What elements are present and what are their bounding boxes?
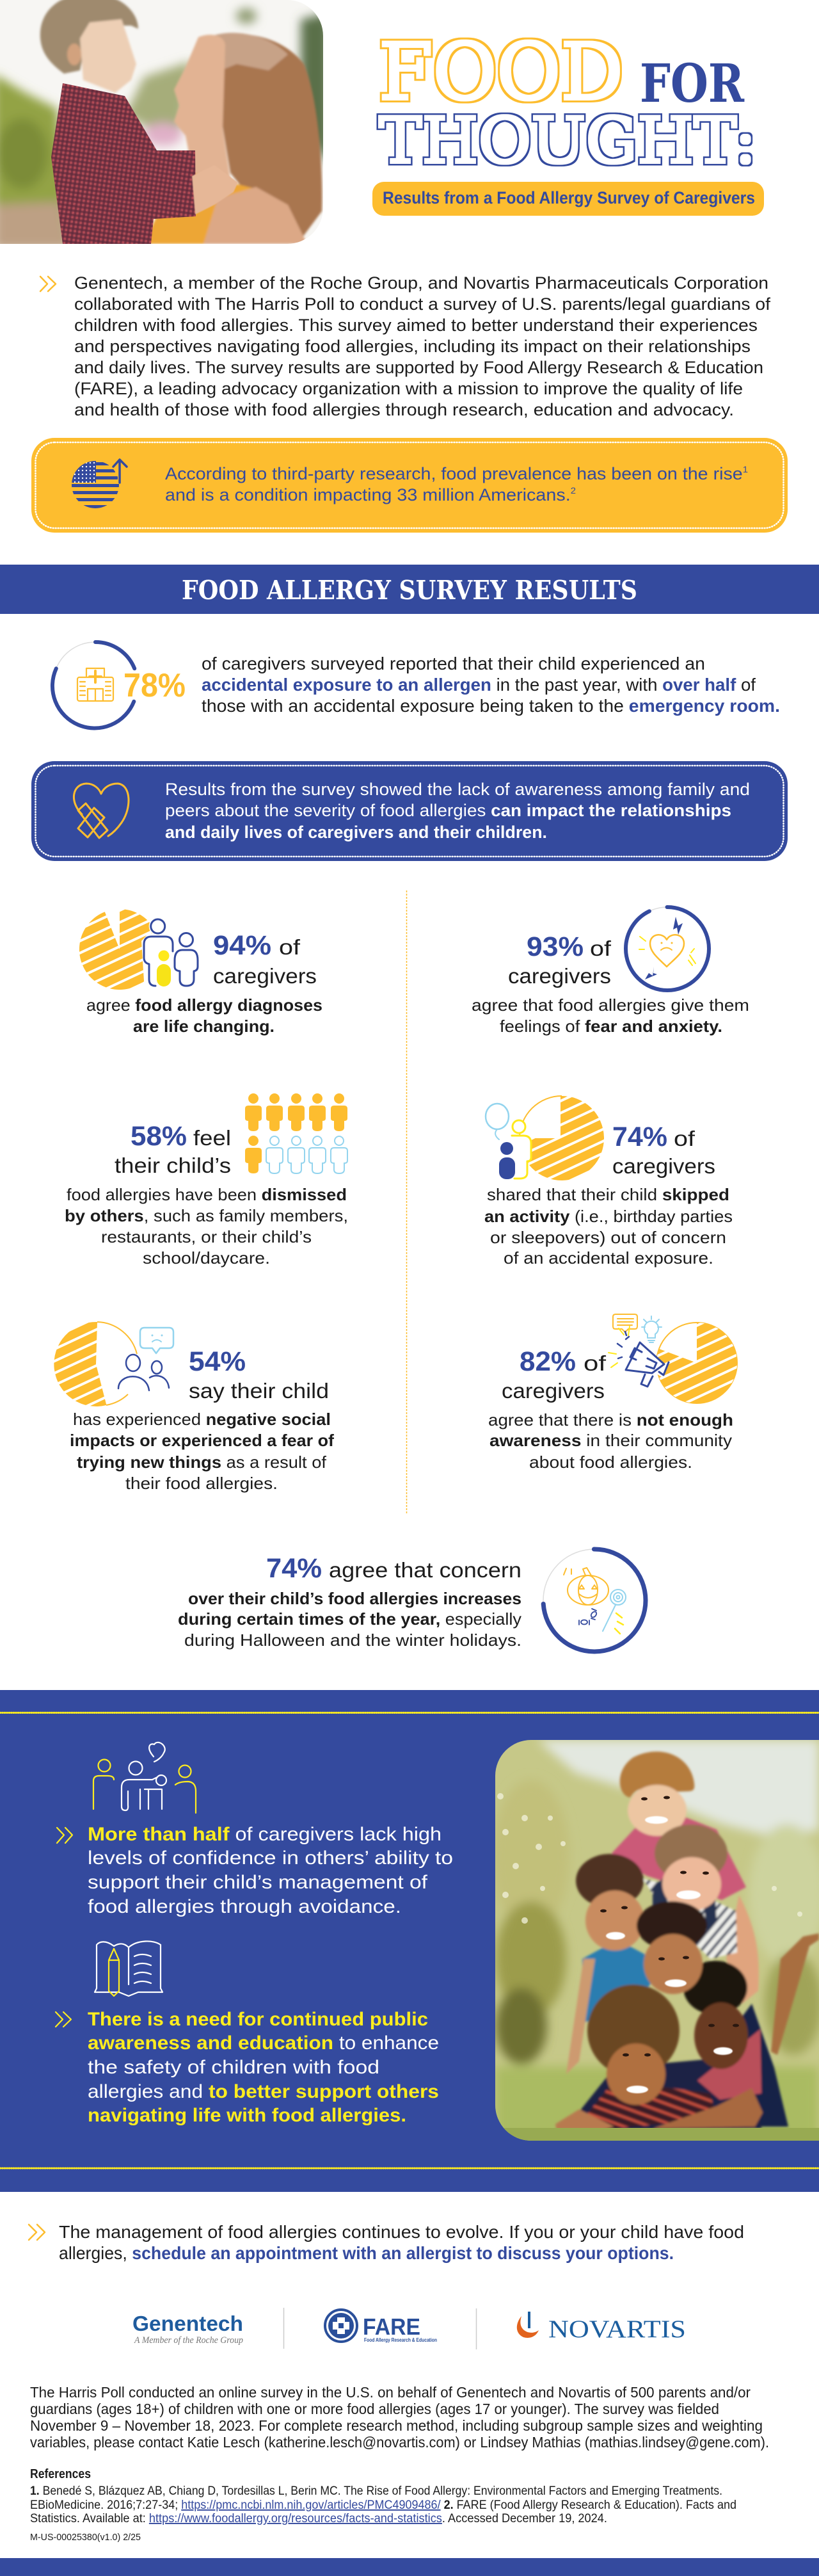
pictogram: ten people	[245, 1093, 347, 1173]
text: public awareness: awareness and education to enhance	[88, 2033, 439, 2054]
footer band	[0, 2558, 819, 2576]
logo: FARE: FARE	[363, 2314, 420, 2340]
description: of caregivers surveyed reported that their child experienced an	[202, 654, 705, 673]
text: public awareness	[88, 2009, 439, 2126]
icon: family with heart	[93, 1743, 196, 1813]
stat: 74 percent seasonal concern	[178, 1549, 646, 1652]
icon: US flag with arrow	[72, 460, 127, 508]
references: References	[30, 2467, 91, 2481]
pie chart	[520, 1096, 604, 1180]
stat: 82 percent: caregivers	[502, 1379, 605, 1403]
description: their food allergies.	[125, 1474, 278, 1493]
description: during certain times of the year, especially	[178, 1609, 521, 1629]
description: trying new things as a result of	[77, 1453, 327, 1472]
intro text: and daily lives. The survey results are supported by Food Allergy Research & Education	[74, 358, 763, 377]
icon: sad speech bubble and people	[118, 1328, 173, 1390]
heading: 74%	[266, 1553, 322, 1584]
callout text: 1	[743, 464, 748, 474]
stat: 78 percent	[52, 642, 780, 728]
description: has experienced negative social	[73, 1410, 331, 1429]
description	[70, 1410, 334, 1493]
stat: 82 percent: of	[584, 1351, 607, 1375]
subtitle pill: Results from a Food Allergy Survey of Caregivers	[383, 188, 755, 207]
stat: 58 percent: feel	[193, 1126, 231, 1150]
icon: book and pencil	[95, 1941, 163, 1996]
panel: awareness callout	[31, 761, 788, 861]
description: food allergies have been dismissed	[67, 1185, 347, 1204]
intro text: and health of those with food allergies through research, education and advocacy.	[74, 400, 734, 419]
section header band	[0, 565, 819, 614]
methodology note	[30, 2384, 769, 2451]
description	[484, 1185, 733, 1268]
panel: prevalence callout	[31, 438, 788, 533]
intro text: (FARE), a leading advocacy organization with a mission to improve the quality of life	[74, 379, 743, 398]
panel: prevalence callout: 2	[571, 485, 576, 495]
logos	[132, 2308, 686, 2349]
description: accidental exposure to an allergen in the past year, with over half of	[202, 675, 756, 695]
description	[488, 1410, 733, 1472]
description: over their child’s food allergies increases	[188, 1589, 521, 1608]
stat: 93 percent: caregivers	[508, 964, 611, 988]
intro text: children with food allergies. This survey aimed to better understand their experiences	[74, 316, 758, 335]
pie chart	[54, 1322, 137, 1406]
references: Statistics. Available at: https://www.foodallergy.org/resources/facts-and-statistics. Accessed December 19, 2024.	[30, 2512, 607, 2525]
call to action: allergies, schedule an appointment with an allergist to discuss your options.	[59, 2243, 674, 2263]
stat: 54 percent	[54, 1322, 334, 1493]
description: agree food allergy diagnoses	[86, 995, 322, 1015]
description: of an accidental exposure.	[504, 1248, 713, 1268]
icon: family	[141, 917, 198, 991]
stat: 93 percent	[472, 907, 749, 1036]
description: shared that their child skipped	[487, 1185, 729, 1204]
text: confidence	[88, 1824, 453, 1917]
description: are life changing.	[133, 1017, 274, 1036]
icon: chevron	[40, 277, 56, 291]
stat: 94 percent	[79, 909, 322, 1036]
description	[472, 995, 749, 1036]
title word: FOOD: FOOD	[379, 27, 623, 118]
text: public awareness: navigating life with food allergies.	[88, 2105, 406, 2126]
text: public awareness: the safety of children with food	[88, 2057, 379, 2078]
description: feelings of fear and anxiety.	[500, 1017, 722, 1036]
photo: children in a pile	[493, 1740, 819, 2143]
methodology note: The Harris Poll conducted an online survey in the U.S. on behalf of Genentech and Novartis of 500 parents and/or	[30, 2384, 751, 2401]
references: EBioMedicine. 2016;7:27-34; https://pmc.ncbi.nlm.nih.gov/articles/PMC4909486/ 2. FARE (Food Allergy Research & Education). Facts and	[30, 2499, 736, 2512]
stat: 93 percent: of	[590, 937, 612, 960]
icon: chevron	[29, 2225, 45, 2240]
description: or sleepovers) out of concern	[490, 1228, 726, 1247]
description	[65, 1185, 348, 1268]
callout text: peers about the severity of food allergies can impact the relationships	[165, 801, 731, 820]
methodology note: guardians (ages 18+) of children with one or more food allergies (ages 17 or younger). The survey was fielded	[30, 2401, 719, 2417]
heading: 74%	[612, 1122, 667, 1152]
description: an activity (i.e., birthday parties	[484, 1207, 733, 1226]
pie chart	[656, 1323, 737, 1403]
heading: 94%	[213, 930, 271, 961]
title word: FOR: FOR	[640, 53, 745, 115]
photo: mother and son	[0, 0, 330, 250]
callout text: and daily lives of caregivers and their children.	[165, 823, 547, 842]
text: confidence: support their child’s management of	[88, 1872, 428, 1893]
description: restaurants, or their child’s	[101, 1227, 312, 1246]
description: about food allergies.	[529, 1453, 692, 1472]
references	[30, 2467, 736, 2543]
panel: prevalence callout: and is a condition impacting 33 million Americans.	[165, 485, 546, 504]
description	[202, 654, 780, 716]
panel: conclusions	[0, 1690, 819, 2192]
stat: 94 percent: of	[279, 935, 301, 959]
description: those with an accidental exposure being taken to the emergency room.	[202, 696, 780, 716]
description: agree that there is not enough	[488, 1410, 733, 1429]
icon: chevron	[57, 1828, 72, 1843]
logo: FARE: Food Allergy Research & Education	[364, 2337, 437, 2343]
logo: Genentech: A Member of the Roche Group	[134, 2335, 243, 2346]
description: agree that food allergies give them	[472, 995, 749, 1015]
stat: 74 percent skipped activity	[484, 1096, 733, 1268]
percent: 78%	[123, 667, 186, 704]
stat: 74 percent skipped activity: caregivers	[612, 1154, 715, 1178]
text: confidence: food allergies through avoidance.	[88, 1896, 401, 1917]
references: 1. Benedé S, Blázquez AB, Chiang D, Tordesillas L, Berin MC. The Rise of Food Allergy: Environmental Factors and Emerging Treatments.	[30, 2484, 722, 2498]
stat: 58 percent	[65, 1093, 348, 1268]
stat: 94 percent: caregivers	[213, 964, 317, 988]
icon: bandaged heart	[74, 784, 129, 838]
description	[178, 1589, 521, 1650]
text: confidence: More than half of caregivers lack high	[88, 1824, 441, 1845]
stat: 58 percent: their child’s	[115, 1154, 231, 1177]
stat: 54 percent: say their child	[189, 1379, 329, 1403]
text: public awareness: There is a need for continued public	[88, 2009, 428, 2030]
icon: hospital	[77, 668, 113, 701]
stat: 82 percent	[488, 1314, 737, 1472]
stat: 74 percent seasonal concern: agree that concern	[329, 1558, 521, 1582]
logo: Novartis: NOVARTIS	[548, 2315, 686, 2343]
intro text: Genentech, a member of the Roche Group, and Novartis Pharmaceuticals Corporation	[74, 273, 768, 293]
description	[86, 995, 322, 1036]
ring with anxious heart	[626, 907, 709, 990]
description: during Halloween and the winter holidays.	[184, 1630, 521, 1650]
heading: 82%	[520, 1346, 576, 1377]
logo: Genentech: Genentech	[132, 2312, 243, 2335]
text: confidence: levels of confidence in others’ ability to	[88, 1847, 453, 1869]
call to action	[59, 2222, 744, 2263]
stat: 74 percent skipped activity: of	[674, 1127, 696, 1150]
heading: 58%	[131, 1121, 187, 1152]
logo: FARE	[325, 2310, 437, 2343]
heading: 54%	[189, 1346, 246, 1377]
icon: megaphone with speech bubble and lightbulb	[608, 1314, 669, 1387]
heading: 93%	[527, 931, 584, 962]
subtitle pill	[372, 182, 764, 216]
call to action: The management of food allergies continues to evolve. If you or your child have food	[59, 2222, 744, 2242]
text: public awareness: allergies and to better support others	[88, 2081, 439, 2102]
callout text	[165, 780, 750, 842]
references: M-US-00025380(v1.0) 2/25	[30, 2532, 141, 2543]
logo: Novartis	[517, 2312, 686, 2343]
pie chart	[79, 909, 160, 990]
title	[379, 27, 756, 178]
description: impacts or experienced a fear of	[70, 1431, 334, 1450]
description: by others , such as family members,	[65, 1206, 348, 1225]
description: school/daycare.	[143, 1248, 270, 1268]
title word: THOUGHT: THOUGHT:	[379, 104, 756, 178]
methodology note: November 9 – November 18, 2023. For complete research method, including subgroup sample sizes and weighting	[30, 2417, 763, 2434]
methodology note: variables, please contact Katie Lesch (katherine.lesch@novartis.com) or Lindsey Mathias (mathias.lindsey@gene.com).	[30, 2434, 769, 2451]
intro text: collaborated with The Harris Poll to conduct a survey of U.S. parents/legal guardians of	[74, 294, 771, 314]
icon: balloon and family	[486, 1104, 531, 1179]
intro text	[74, 273, 771, 419]
ring with pumpkin and candy	[543, 1549, 646, 1652]
logo: Genentech	[132, 2312, 243, 2346]
callout text: Results from the survey showed the lack of awareness among family and	[165, 780, 750, 799]
intro text: and perspectives navigating food allergies, including its impact on their relationships	[74, 337, 751, 356]
ring	[52, 642, 134, 728]
callout text: According to third-party research, food prevalence has been on the rise	[165, 464, 710, 483]
description: awareness in their community	[489, 1431, 732, 1450]
icon: chevron	[56, 2012, 71, 2027]
section header band: FOOD ALLERGY SURVEY RESULTS	[182, 575, 637, 606]
